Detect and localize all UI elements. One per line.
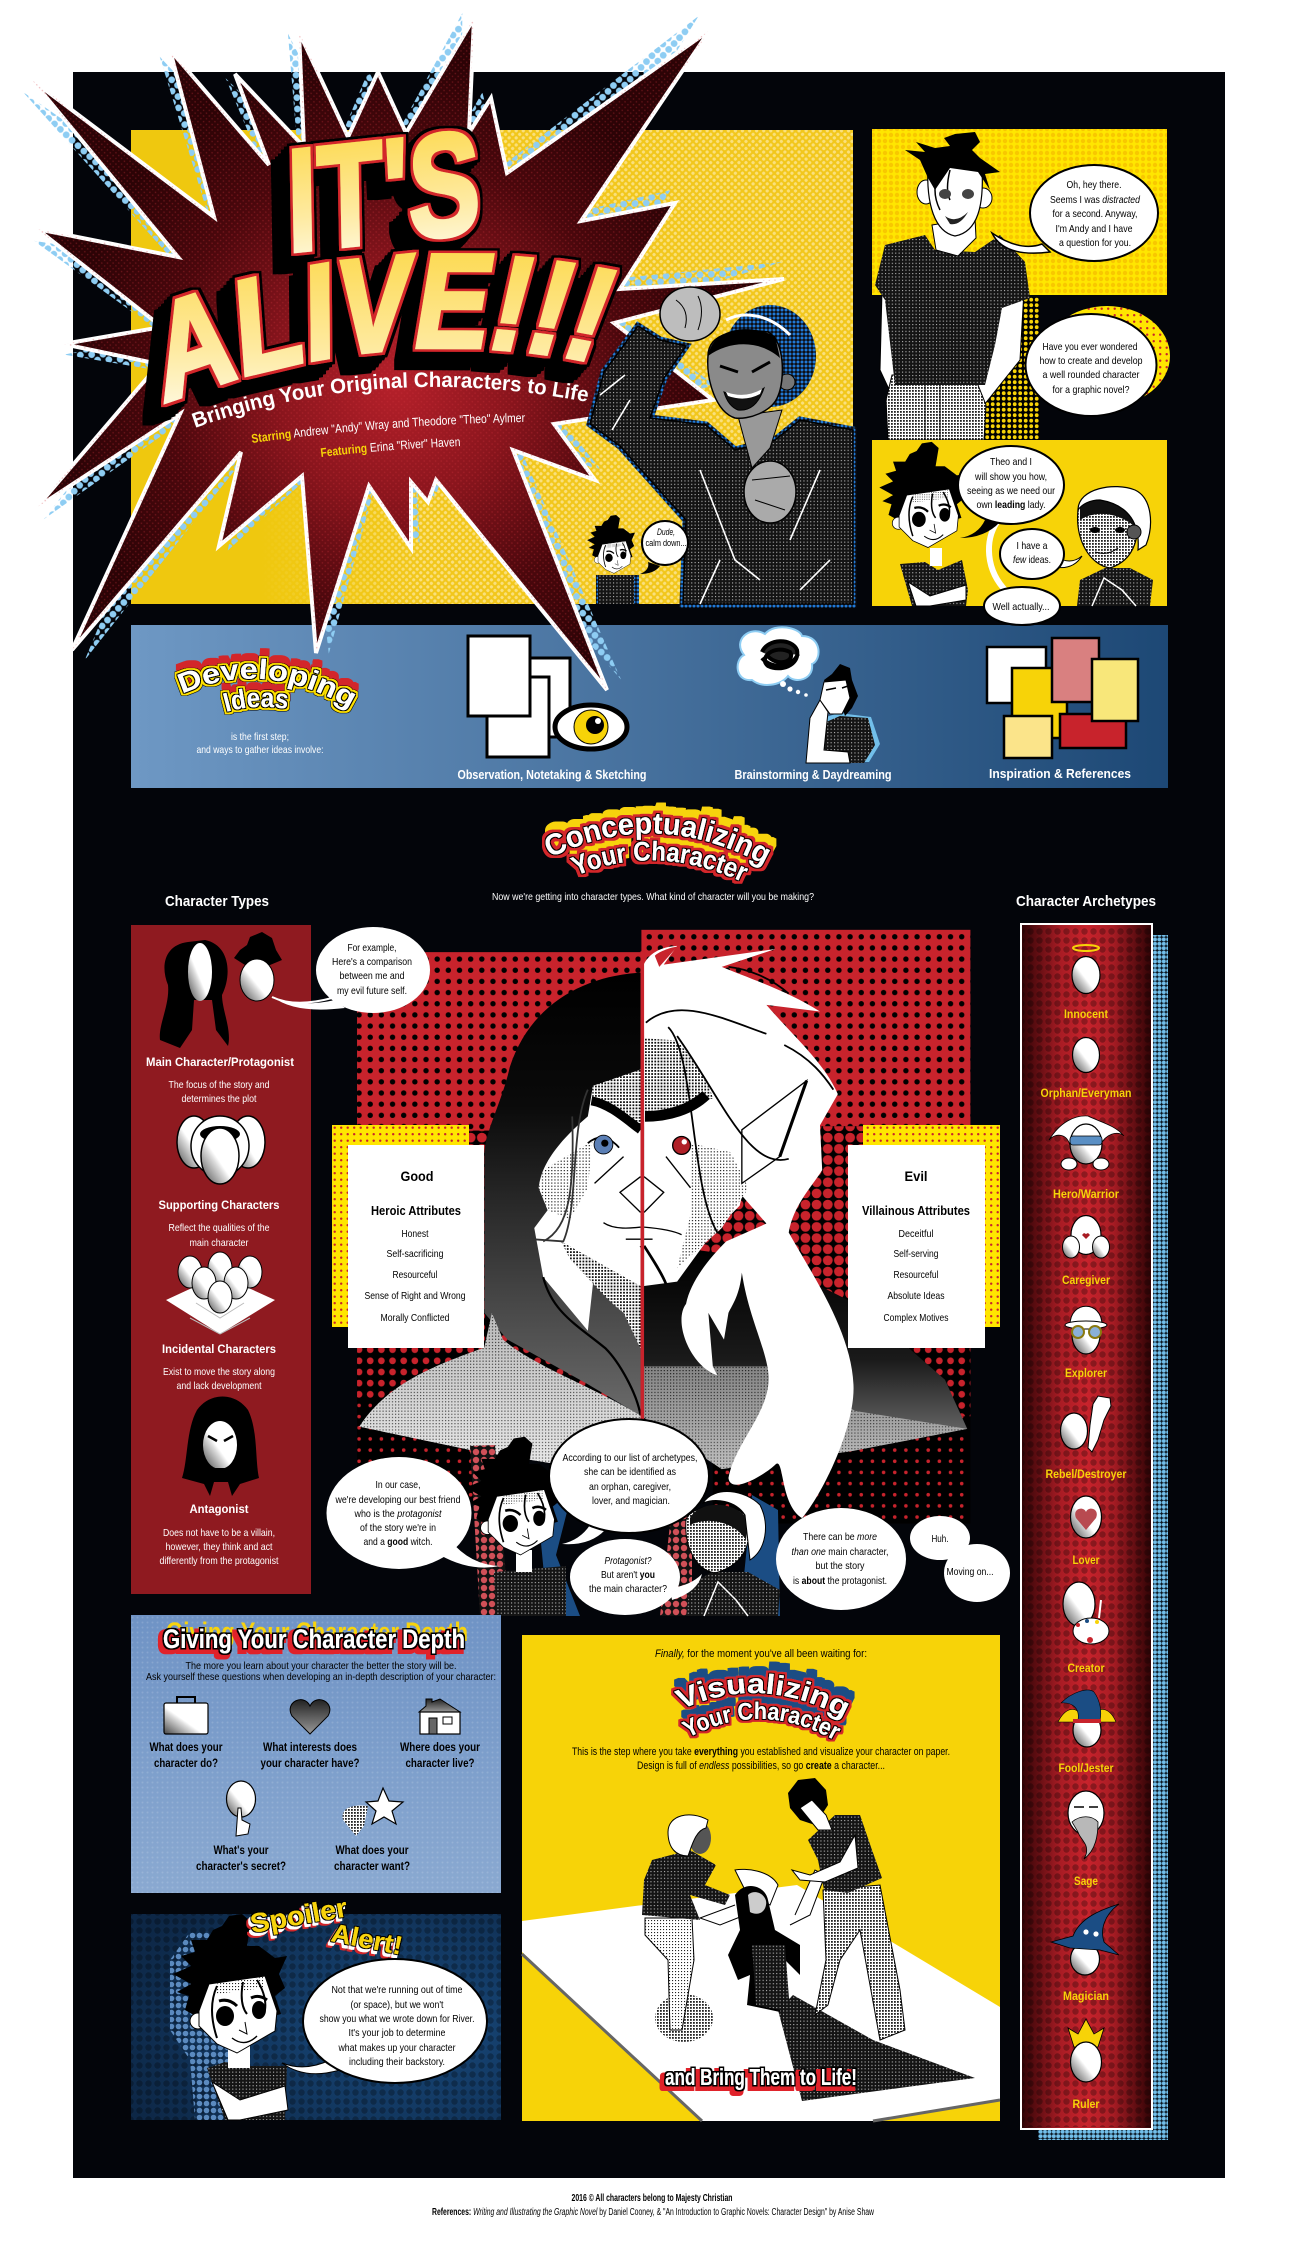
bubble: leading lady [958,446,1064,538]
bubble: first speech: I'm Andy and I have [1056,223,1133,235]
figure: Theo smiling [1077,487,1153,606]
heading: character archetypes: Character Archetypes [1016,893,1156,910]
bubble: leading lady: Theo and I [990,456,1032,468]
heading: developing ideas: Ideas [220,678,291,715]
figure: Andy arms crossed [879,442,968,606]
label: main character: determines the plot [182,1093,257,1105]
caption: inspiration: Inspiration & References [989,766,1131,781]
paper edges [522,1954,1000,2121]
title: ALIVE!!! [142,248,622,426]
panel: evil attributes: Absolute Ideas [888,1290,944,1302]
archetype: caregiver [1062,1216,1110,1287]
footer credits: 2016 © All characters belong to Majesty Christian [572,2193,732,2204]
bubble: first speech: a question for you. [1059,237,1131,249]
icon: antagonist [182,1396,259,1496]
text: depth intro: The more you learn about your character the better the story will be. [186,1660,456,1672]
text: visualizing intro [572,1746,950,1772]
figure: Andy reaching [788,1778,905,2040]
panel: character types [131,925,430,1594]
icon: protagonist heads [160,932,332,1048]
bubble: spoiler speech: It's your job to determine [348,2027,446,2039]
text: depth intro: Ask yourself these questions when developing an in-depth description of your character: [146,1671,496,1683]
central divider [641,951,644,1420]
caption: brainstorming: Brainstorming & Daydreaming [734,767,892,782]
bubble: second speech [1026,306,1170,416]
starburst [21,1,798,702]
bubble: protagonist question: But aren't you [601,1569,655,1581]
text: finally: Finally, for the moment you've all been waiting for: [655,1648,867,1660]
bubble: spoiler speech: (or space), but we won't [350,1999,444,2011]
heading: spoiler alert: Alert! [329,1917,405,1961]
bubble: for example: my evil future self. [337,985,407,997]
label: antagonist: Does not have to be a villain, [163,1527,275,1539]
central comparison artwork [326,930,1010,1616]
bubble: leading lady: own leading lady. [976,499,1046,511]
label: antagonist: Antagonist [190,1504,249,1516]
label: supporting: Reflect the qualities of the [168,1222,270,1234]
bubble: according to archetypes: an orphan, caregiver, [589,1481,671,1493]
bubble: more than one: is about the protagonist. [793,1575,887,1587]
panel: developing ideas [131,625,1168,788]
panel: character archetypes [1021,924,1168,2140]
connector between bubbles [989,522,1007,592]
bubble: in our case: of the story we're in [360,1522,436,1534]
archetype: magician [1051,1904,1119,2003]
subtitle: Bringing Your Original Characters to Life [192,372,588,428]
archetype: caregiver: Caregiver [1062,1275,1110,1287]
archetype: innocent [1064,945,1108,1021]
heading: spoiler alert: Spoiler [248,1892,350,1939]
figure: Theo front [660,1491,780,1616]
bubble: second speech: how to create and develop [1040,355,1143,367]
icon: reference swatches [987,638,1138,758]
item: home: character live? [406,1758,474,1770]
bubble: protagonist question: the main character? [589,1583,667,1595]
archetype: hero: Hero/Warrior [1053,1189,1119,1201]
bubble: for example: between me and [340,970,405,982]
title: IT'S [286,99,481,283]
bubble: according to archetypes: According to our list of archetypes, [562,1452,698,1464]
credits: Featuring Erina "River" Haven [320,438,460,457]
icon: supporting heads [177,1116,265,1184]
archetype: jester: Fool/Jester [1058,1763,1114,1775]
panel: evil attributes: Deceitful [898,1228,934,1240]
label: antagonist [160,1504,279,1567]
label: antagonist: differently from the protagonist [160,1555,279,1567]
label: incidental: and lack development [176,1380,262,1392]
bubble: huh moving on: Huh. [932,1533,948,1545]
archetype: magician: Magician [1063,1991,1109,2003]
archetype: orphan: Orphan/Everyman [1040,1088,1132,1100]
panel: main yellow title panel [131,130,853,604]
left shoulder [359,1313,641,1469]
heading: visualizing: Your Character [678,1696,847,1742]
panel: giving your character depth [131,1615,501,1893]
item: secret [196,1781,286,1873]
label: main character: Main Character/Protagonist [146,1057,294,1069]
panel: good attributes [332,1125,484,1348]
bubble: few ideas: few ideas. [1013,554,1051,566]
heading: visualizing: Visualizing [671,1662,855,1724]
archetype: sage: Sage [1074,1876,1098,1888]
bubble: for example: For example, [348,942,396,954]
bubble: in our case [326,1457,500,1569]
bubble: more than one: than one main character, [792,1546,888,1558]
item: want [334,1788,410,1873]
heading: conceptualizing your character: Your Character [566,836,752,884]
credits: Starring Andrew "Andy" Wray and Theodore "Theo" Aylmer [252,413,525,443]
figure: Theo pulling [642,1815,730,2042]
label: main character: The focus of the story and [168,1079,270,1091]
item: home: Where does your [400,1742,480,1754]
archetype: creator: Creator [1068,1663,1105,1675]
bubble: in our case: and a good witch. [364,1536,432,1548]
archetype: jester [1058,1690,1116,1775]
cast shadow [778,1995,975,2101]
panel: visualizing your character [521,1635,1000,2122]
bubble: well actually [984,587,1060,625]
bubble: first speech: for a second. Anyway, [1052,208,1138,220]
icon: thought cloud [738,627,819,697]
figure: Theo cheering [590,287,853,604]
panel: good attributes: Sense of Right and Wrong [364,1290,466,1302]
bubble: in our case: In our case, [376,1479,420,1491]
label: supporting: main character [190,1237,249,1249]
heading: conceptualizing your character: Conceptualizing [542,802,776,872]
text: intro [196,731,324,756]
item: secret: What's your [214,1845,269,1857]
archetype: innocent: Innocent [1064,1009,1108,1021]
label: incidental: Incidental Characters [162,1344,276,1356]
figure: small Andy with speech [587,515,688,604]
archetype: ruler [1068,2019,1104,2111]
item: want: character want? [334,1861,410,1873]
text: intro: and ways to gather ideas involve: [196,744,324,756]
bubble: protagonist question: Protagonist? [604,1555,652,1567]
panel: evil attributes: Evil [904,1168,928,1184]
archetype: hero [1049,1116,1124,1201]
item: job: character do? [154,1758,218,1770]
elf ear [742,1081,807,1183]
figure: daydreaming girl [806,664,880,763]
heading: developing ideas: Developing [174,648,359,714]
bubble: spoiler speech: Not that we're running out of time [332,1984,463,1996]
bubble: spoiler speech: including their backstory. [349,2056,445,2068]
bubble: leading lady: will show you how, [974,471,1047,483]
bubble: second speech: Have you ever wondered [1042,341,1138,353]
left face [534,1072,641,1331]
icon: papers and eye [468,636,627,757]
item: home [400,1699,480,1770]
icon: incidental heads [166,1252,275,1334]
bubble: dude calm down: calm down... [646,538,686,548]
figure: Andy front [466,1437,580,1616]
bubble: second speech: a well rounded character [1042,369,1140,381]
text: concept intro: Now we're getting into character types. What kind of character will you be making? [492,891,814,903]
white hair [644,946,854,1518]
bubble: first speech [992,165,1158,261]
heading: giving depth: Giving Your Character Depth [163,1624,465,1654]
paper sheet [522,1885,1000,2121]
figure: Andy [170,1914,288,2120]
title [142,99,622,457]
bubble: for example: Here's a comparison [332,956,412,968]
panel: good attributes: Heroic Attributes [371,1204,461,1218]
bubble: few ideas [1000,529,1082,579]
item: interests [260,1700,360,1770]
bubble: spoiler speech: what makes up your character [338,2042,456,2054]
text: depth intro [146,1660,496,1683]
archetype: explorer: Explorer [1065,1368,1107,1380]
bubble: according to archetypes [549,1419,709,1544]
bubble: in our case: we're developing our best friend [335,1494,461,1506]
bubble: for example [273,927,430,1013]
bubble: huh moving on: Moving on... [946,1566,994,1578]
bubble: spoiler speech [282,1959,487,2083]
footer credits: References: Writing and Illustrating the Graphic Novel by Daniel Cooney, & "An Introduction to Graphic Novels: Character Design" by Anise Shaw [432,2207,875,2218]
label: antagonist: however, they think and act [166,1541,273,1553]
panel: Andy introduction [872,129,1170,440]
heading: bring them to life: and Bring Them to Life! [665,2064,857,2090]
panel: evil attributes: Complex Motives [884,1312,948,1324]
item: interests: your character have? [260,1758,360,1770]
figure: Andy standing [875,132,1030,440]
bubble: huh moving on [910,1516,1010,1602]
bubble: more than one: but the story [816,1560,865,1572]
panel: evil attributes: Resourceful [894,1269,938,1281]
panel: good attributes: Self-sacrificing [386,1248,444,1260]
archetype: orphan [1040,1038,1132,1100]
bubble: first speech: Oh, hey there. [1066,179,1122,191]
label: main character [146,1057,294,1105]
bubble: leading lady: seeing as we need our [967,485,1055,497]
item: want: What does your [336,1845,409,1857]
bubble: more than one: There can be more [803,1531,877,1543]
text: intro: is the first step; [231,731,289,743]
bubble: few ideas: I have a [1016,540,1048,552]
heading: visualizing [671,1662,855,1742]
item: secret: character's secret? [196,1861,286,1873]
panel: good attributes: Good [400,1168,434,1184]
label: supporting [158,1200,280,1249]
bubble: second speech: for a graphic novel? [1052,384,1130,396]
panel: good attributes: Resourceful [392,1269,438,1281]
item: job: What does your [150,1742,223,1754]
bubble: well actually: Well actually... [992,601,1050,613]
archetype: lover: Lover [1072,1555,1100,1567]
heading: character types: Character Types [165,893,269,910]
panel: evil attributes [848,1125,1000,1348]
bubble: in our case: who is the protagonist [354,1508,442,1520]
figure: River emerging [700,1869,825,2012]
panel: leading lady conversation [872,440,1167,625]
archetype: rebel [1046,1396,1127,1481]
panel: evil attributes: Villainous Attributes [862,1204,970,1218]
archetype: ruler: Ruler [1072,2099,1100,2111]
bubble: dude calm down [640,521,688,574]
right shoulder [644,1250,967,1469]
panel: good attributes: Honest [402,1228,429,1240]
bubble: according to archetypes: she can be identified as [584,1466,676,1478]
right face [644,1038,749,1286]
panel: evil attributes: Self-serving [894,1248,939,1260]
bubble: more than one [776,1508,906,1610]
text: visualizing intro: This is the step where you take everything you established and visualize your character on paper. [572,1746,950,1758]
archetype: lover [1070,1496,1102,1567]
left hood [484,973,641,1416]
bubble: dude calm down: Dude, [657,527,675,537]
item: interests: What interests does [263,1742,357,1754]
text: visualizing intro: Design is full of endless possibilities, so go create a character... [637,1760,885,1772]
footer credits [432,2193,875,2218]
panel: good attributes: Morally Conflicted [380,1312,450,1324]
label: incidental: Exist to move the story along [163,1366,275,1378]
archetype: explorer [1065,1306,1107,1380]
label: incidental [162,1344,276,1392]
bubble: spoiler speech: show you what we wrote down for River. [320,2013,474,2025]
label: supporting: Supporting Characters [158,1200,280,1212]
bubble: according to archetypes: lover, and magician. [592,1495,670,1507]
archetype: sage [1068,1791,1104,1888]
bubble: first speech: Seems I was distracted [1050,194,1141,206]
caption: observation: Observation, Notetaking & Sketching [458,767,647,782]
item: job [150,1697,223,1770]
archetype: creator [1063,1582,1109,1675]
heading: spoiler alert [248,1892,405,1961]
bubble: protagonist question [570,1539,702,1615]
archetype: rebel: Rebel/Destroyer [1046,1469,1127,1481]
panel: spoiler alert [131,1892,501,2120]
